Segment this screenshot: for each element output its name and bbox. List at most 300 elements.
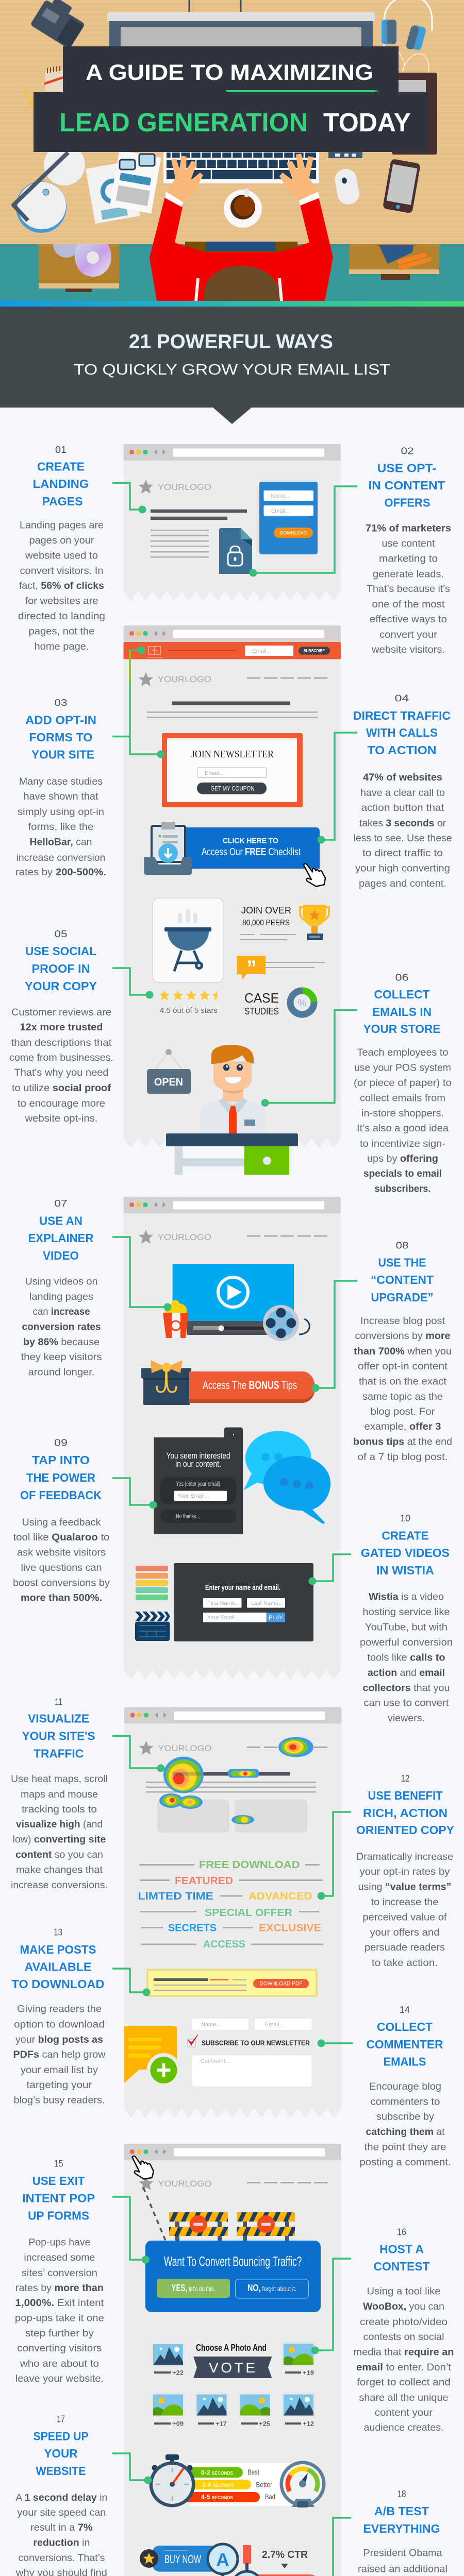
body: maps and mouse xyxy=(21,1789,98,1800)
body: around longer. xyxy=(28,1367,95,1378)
number: 04 xyxy=(395,693,409,704)
panel: browser window 1, landing page xyxy=(124,444,341,601)
step 09 text xyxy=(13,1437,110,1604)
star rating xyxy=(159,990,218,1015)
body: subscribers. xyxy=(374,1184,431,1194)
exit intent popup xyxy=(145,2241,321,2312)
heading: IN CONTENT xyxy=(368,479,445,492)
join over 80,000 peers xyxy=(240,905,296,940)
step 13 text xyxy=(11,1927,106,2106)
title line 2 white word: TODAY xyxy=(323,108,411,137)
body: to encourage more xyxy=(18,1098,105,1109)
heading xyxy=(11,1943,105,1991)
heat spot: title bar xyxy=(228,1769,259,1777)
body: Dramatically increase xyxy=(356,1852,453,1862)
heading: TRAFFIC xyxy=(34,1747,84,1760)
body: Many case studies xyxy=(19,776,103,787)
step 15 text xyxy=(15,2159,104,2384)
body: pages, not the xyxy=(29,626,95,637)
heading: GATED VIDEOS xyxy=(361,1546,450,1560)
heading xyxy=(353,709,451,757)
blue sign-up form: Name... xyxy=(271,493,291,499)
connector arrow: step 09 xyxy=(112,1478,157,1509)
speech bubbles xyxy=(243,1431,330,1524)
body: commenters to xyxy=(370,2097,440,2108)
CTR labels xyxy=(159,2549,308,2576)
body: audience creates. xyxy=(364,2422,443,2433)
heading xyxy=(371,1256,434,1304)
heading: CREATE xyxy=(382,1529,429,1543)
feedback survey card xyxy=(154,1427,243,1534)
gated video form: Last Name... xyxy=(251,1600,283,1606)
heading: TAP INTO xyxy=(32,1453,90,1467)
testimonial quote xyxy=(237,956,325,980)
body: Using a feedback xyxy=(22,1517,101,1528)
blue sign-up form: Email... xyxy=(271,508,290,514)
vote heading: Choose A Photo And xyxy=(196,2343,267,2353)
download PDF bar xyxy=(146,1969,318,1997)
body xyxy=(356,1852,453,1969)
body: rates by 200-500%. xyxy=(15,867,106,878)
heading: PAGES xyxy=(42,495,82,508)
body: YouTube, but with xyxy=(365,1622,448,1633)
connector arrow: step 10 xyxy=(308,1554,351,1585)
hello bar: Email... xyxy=(252,648,271,654)
newsletter popup: JOIN NEWSLETTER xyxy=(191,749,274,760)
power word cloud: ACCESS xyxy=(203,1939,245,1950)
icon: clipboard in tray xyxy=(144,822,192,875)
page speed chart xyxy=(150,2454,326,2507)
body: simply using opt-in xyxy=(18,807,104,818)
heading xyxy=(22,2174,95,2223)
body: directed to landing xyxy=(18,611,105,622)
hero illustration: desk top view xyxy=(0,0,464,301)
open sign xyxy=(147,1049,191,1094)
icon: locked document xyxy=(219,528,252,574)
body: to take action. xyxy=(372,1958,438,1969)
body: conversions by more xyxy=(355,1331,451,1342)
body: specials to email xyxy=(363,1168,442,1179)
connector arrow: step 13 xyxy=(112,1969,151,1996)
speed bars: 2-4 SECONDS xyxy=(202,2481,234,2488)
heading xyxy=(356,1789,454,1837)
body: using “value terms” xyxy=(358,1882,452,1893)
panel: browser window 3, video, feedback, gated video xyxy=(124,1197,341,1680)
body: generate leads. xyxy=(373,569,444,580)
heading: YOUR COPY xyxy=(25,979,97,993)
body: Landing pages are xyxy=(20,520,104,531)
step 01 text xyxy=(18,445,105,652)
heading: LANDING xyxy=(33,477,89,490)
feedback survey card: Your Email... xyxy=(177,1493,209,1499)
body: catching them at xyxy=(366,2127,445,2138)
heading xyxy=(33,2430,89,2478)
body: 12x more trusted xyxy=(20,1022,103,1033)
body: ask website visitors xyxy=(17,1548,106,1558)
body: your blog posts as xyxy=(15,2035,103,2045)
magnifier B xyxy=(232,2545,262,2576)
heading xyxy=(368,461,445,510)
body: Using videos on xyxy=(25,1277,98,1287)
number: 11 xyxy=(55,1697,62,1707)
monitor xyxy=(107,12,375,49)
vote counts: +22 xyxy=(172,2369,184,2376)
connector arrow: step 14 xyxy=(318,2039,353,2047)
button A: BUY NOW xyxy=(164,2553,201,2566)
number: 09 xyxy=(54,1437,68,1448)
body: media that require an xyxy=(354,2347,454,2358)
body xyxy=(11,1774,108,1891)
star rating: 4.5 out of 5 stars xyxy=(160,1006,218,1015)
vote ribbon: VOTE xyxy=(209,2360,255,2376)
bonus tips button: Access The BONUS Tips xyxy=(203,1379,297,1392)
number: 17 xyxy=(57,2414,65,2425)
red sweater arms and torso xyxy=(150,195,333,301)
comment form: SUBSCRIBE TO OUR NEWSLETTER xyxy=(202,2039,310,2047)
right drawer xyxy=(349,244,439,280)
body xyxy=(354,1047,452,1194)
body: website visitors. xyxy=(371,645,445,655)
number: 14 xyxy=(400,2005,410,2015)
vote counts: +09 xyxy=(172,2420,184,2428)
body: who are about to xyxy=(20,2359,99,2369)
heading: PROOF IN xyxy=(32,962,90,975)
connector arrow: step 18 xyxy=(318,2518,351,2576)
heading xyxy=(22,1712,95,1760)
body: your opt-in rates by xyxy=(360,1867,450,1877)
body: by 86% because xyxy=(23,1337,100,1348)
gated video form xyxy=(174,1563,313,1641)
body: raised an additional xyxy=(358,2564,448,2575)
step 10 text xyxy=(360,1513,453,1724)
body: HelloBar, can xyxy=(30,837,92,848)
body: more than 500%. xyxy=(21,1593,102,1604)
body: content so you can xyxy=(15,1850,103,1860)
body: visualize high (and xyxy=(16,1819,103,1830)
heading: VISUALIZE xyxy=(28,1712,89,1725)
number: 18 xyxy=(397,2489,406,2499)
shirt cuffs xyxy=(165,192,320,207)
dashed cursor trail xyxy=(143,2188,165,2241)
hello bar xyxy=(124,642,341,659)
hello bar: SUBSCRIBE xyxy=(304,649,325,653)
body: one of the most xyxy=(372,599,445,610)
body: forget to collect and xyxy=(357,2377,451,2388)
panel: browser window 5, exit intent, contest, speed, A/B test xyxy=(124,2144,341,2576)
icon: gift box xyxy=(141,1360,191,1405)
body: use content xyxy=(382,538,435,549)
body: That's why you need xyxy=(14,1067,108,1078)
heading: OF FEEDBACK xyxy=(20,1488,102,1502)
heading xyxy=(28,1214,94,1262)
logo and nav xyxy=(139,1230,327,1244)
connector arrow: step 16 xyxy=(311,2259,351,2354)
report papers and glasses xyxy=(86,150,161,224)
body: subscribe by xyxy=(376,2112,435,2123)
body: 71% of marketers xyxy=(366,523,451,534)
headphones xyxy=(382,0,432,95)
body: action and email xyxy=(368,1668,445,1679)
body: low) converting site xyxy=(12,1835,106,1845)
body: they keep visitors xyxy=(21,1352,102,1363)
magnifier A xyxy=(208,2544,238,2576)
step 14 text xyxy=(360,2005,451,2168)
exit intent popup: Want To Convert Bouncing Traffic? xyxy=(164,2253,302,2269)
green underline xyxy=(226,90,381,92)
heading: AVAILABLE xyxy=(25,1960,92,1974)
heading: INTENT POP xyxy=(22,2192,95,2205)
body: WooBox, you can xyxy=(363,2301,444,2312)
button B xyxy=(255,2574,321,2576)
wooden desk surface xyxy=(0,0,464,244)
power word cloud: SECRETS xyxy=(168,1923,217,1934)
heading: UP FORMS xyxy=(28,2209,89,2223)
body: Use heat maps, scroll xyxy=(11,1774,108,1785)
power word cloud: SPECIAL OFFER xyxy=(205,1907,293,1919)
heading: USE BENEFIT xyxy=(368,1789,442,1802)
newsletter popup: GET MY COUPON xyxy=(210,785,255,792)
connector arrow: step 11 xyxy=(112,1736,165,1772)
icon: stopwatch xyxy=(150,2454,195,2507)
number: 06 xyxy=(395,973,408,983)
heading: EXPLAINER xyxy=(28,1231,94,1245)
body: marketing to xyxy=(379,553,438,565)
heading: EVERYTHING xyxy=(363,2522,440,2535)
body: of a 7 tip blog post. xyxy=(358,1452,448,1463)
keyboard xyxy=(163,152,319,183)
shop counter xyxy=(166,1133,298,1175)
heading: HOST A xyxy=(379,2242,424,2256)
body: home page. xyxy=(34,641,89,652)
body: action button that xyxy=(361,803,444,814)
case studies: STUDIES xyxy=(244,1006,279,1016)
heading: COLLECT xyxy=(374,988,430,1001)
body: tool like Qualaroo to xyxy=(13,1532,109,1543)
heading xyxy=(25,944,97,993)
heading: YOUR STORE xyxy=(363,1022,440,1036)
connector arrow: step 06 xyxy=(261,1010,357,1107)
tablet xyxy=(392,73,437,155)
BBQ product card xyxy=(153,898,223,982)
body: Pop-ups have xyxy=(28,2237,90,2248)
heading: TO ACTION xyxy=(367,743,436,757)
body: pages and content. xyxy=(359,878,446,889)
body: tools like calls to xyxy=(367,1653,445,1663)
body: same topic as the xyxy=(362,1392,443,1402)
subtitle headline: 21 POWERFUL WAYS xyxy=(129,331,333,353)
body: rates by more than xyxy=(15,2283,104,2294)
number: 15 xyxy=(54,2159,63,2169)
case studies xyxy=(244,990,314,1016)
number: 13 xyxy=(54,1927,62,1937)
body: than descriptions that xyxy=(11,1038,112,1048)
exit intent popup: YES, let's do this. xyxy=(171,2283,216,2293)
body: create photo/video xyxy=(360,2317,448,2328)
body: use your POS system xyxy=(354,1062,451,1074)
heading: EMAILS IN xyxy=(372,1005,432,1019)
logo and nav xyxy=(139,1741,327,1755)
call to action banner xyxy=(144,822,327,888)
teal floor xyxy=(0,244,464,301)
body xyxy=(15,776,106,878)
headline bars xyxy=(147,702,318,718)
heading: DIRECT TRAFFIC xyxy=(353,709,451,722)
gated video form: Your Email... xyxy=(207,1615,239,1621)
body xyxy=(354,772,452,889)
heat spot: content left xyxy=(159,1793,203,1809)
power word cloud: FEATURED xyxy=(175,1875,233,1887)
icon: trophy xyxy=(300,905,329,940)
body: sites’ conversion xyxy=(22,2268,97,2279)
logo and nav: YOURLOGO xyxy=(158,1232,211,1242)
subtitle line: TO QUICKLY GROW YOUR EMAIL LIST xyxy=(74,362,390,378)
subtitle section xyxy=(0,307,464,424)
heading: RICH, ACTION xyxy=(363,1806,448,1820)
speed bars xyxy=(180,2467,275,2502)
step 07 text xyxy=(21,1198,102,1378)
power word cloud: ADVANCED xyxy=(248,1891,312,1902)
body: Customer reviews are xyxy=(11,1007,111,1018)
heading: ADD OPT-IN xyxy=(25,714,96,727)
title banner xyxy=(34,46,428,152)
heading: MAKE POSTS xyxy=(20,1943,96,1956)
heading: USE AN xyxy=(39,1214,82,1228)
speed bars: Bad xyxy=(265,2493,275,2501)
vote counts: +12 xyxy=(303,2420,314,2428)
body: conversion rates xyxy=(22,1322,101,1332)
body: come from businesses. xyxy=(9,1053,113,1063)
speed bars: 0-2 SECONDS xyxy=(201,2469,233,2476)
comment form xyxy=(188,2019,311,2087)
body: content your xyxy=(375,2408,433,2418)
body: your email list by xyxy=(21,2065,98,2076)
CTR labels: 2.7% CTR xyxy=(262,2549,308,2561)
bonus tips button xyxy=(189,1371,315,1403)
body: targeting your xyxy=(27,2080,92,2091)
step 05 text xyxy=(9,929,113,1124)
heading: WEBSITE xyxy=(36,2464,86,2478)
step 18 text xyxy=(353,2489,453,2576)
feedback survey card: You seem interested xyxy=(167,1451,230,1461)
heading: FORMS TO xyxy=(29,731,93,744)
body: (or piece of paper) to xyxy=(354,1078,452,1089)
heading: EMAILS xyxy=(384,2055,426,2069)
call to action banner: CLICK HERE TO xyxy=(223,837,278,845)
body: A 1 second delay in xyxy=(15,2493,107,2503)
body: takes 3 seconds or xyxy=(359,818,446,829)
join over 80,000 peers: JOIN OVER xyxy=(241,905,291,916)
case studies: % xyxy=(298,998,307,1009)
body xyxy=(13,2493,110,2576)
body: less to see. Use these xyxy=(354,833,452,844)
body: to increase the xyxy=(371,1897,438,1908)
body xyxy=(353,1316,452,1463)
heading: VIDEO xyxy=(43,1249,79,1262)
phone xyxy=(383,159,421,213)
body xyxy=(360,2081,451,2168)
body: reduction in xyxy=(33,2538,90,2548)
body xyxy=(9,1007,113,1124)
body: Using a tool like xyxy=(367,2286,440,2297)
connector arrow: step 03 xyxy=(112,646,165,758)
lamp xyxy=(13,144,85,233)
body: President Obama xyxy=(363,2548,442,2558)
newsletter popup xyxy=(162,733,303,807)
page text bars xyxy=(151,510,247,557)
body: pop-ups take it one xyxy=(15,2313,104,2324)
body: Wistia is a video xyxy=(369,1592,444,1603)
heading: USE THE xyxy=(378,1256,426,1269)
body: collectors that you xyxy=(363,1683,450,1693)
body xyxy=(366,523,451,655)
chair xyxy=(185,242,297,301)
body xyxy=(13,2004,106,2106)
connector arrow: step 05 xyxy=(112,968,154,998)
monitor stand lines xyxy=(189,0,241,12)
step 04 text xyxy=(353,693,452,889)
step 11 text xyxy=(11,1697,108,1891)
body: your offers and xyxy=(370,1927,439,1938)
heat spot: content right xyxy=(231,1815,254,1824)
body: increase conversion xyxy=(16,853,105,863)
heading: YOUR SITE'S xyxy=(22,1730,95,1743)
number: 02 xyxy=(401,446,413,456)
body: Giving readers the xyxy=(17,2004,102,2015)
heading: OFFERS xyxy=(385,496,430,510)
page wireframe xyxy=(146,1772,317,1833)
gated video form: PLAY xyxy=(269,1615,283,1621)
coffee cup xyxy=(224,189,262,228)
logo and nav: YOURLOGO xyxy=(158,2179,211,2189)
mouse xyxy=(333,167,361,206)
power word cloud: LIMTED TIME xyxy=(138,1891,213,1902)
number: 05 xyxy=(55,929,67,939)
body: fact, 56% of clicks xyxy=(19,581,104,591)
body: result in a 7% xyxy=(30,2522,93,2533)
heading: WITH CALLS xyxy=(366,726,438,739)
number: 12 xyxy=(401,1773,409,1784)
connector arrow: step 01 xyxy=(112,483,146,513)
icon: hand cursor xyxy=(303,860,327,888)
body: your site speed can xyxy=(17,2507,106,2518)
body: boost conversions by xyxy=(13,1578,110,1589)
icon: speed gauge xyxy=(279,2461,326,2507)
A/B test illustration xyxy=(140,2544,321,2576)
body xyxy=(354,2286,454,2433)
heading: A/B TEST xyxy=(374,2504,429,2518)
heading: COLLECT xyxy=(377,2020,433,2033)
heading: COMMENTER xyxy=(366,2038,443,2051)
body: PDFs can help grow xyxy=(13,2049,106,2060)
body xyxy=(18,520,105,652)
body: Encourage blog xyxy=(369,2081,441,2092)
body: your high converting xyxy=(355,863,450,874)
body: hosting service like xyxy=(363,1607,450,1618)
body: landing pages xyxy=(29,1292,93,1302)
comment form: Email... xyxy=(265,2022,284,2028)
icon: checked box xyxy=(188,2035,198,2047)
call to action banner: Access Our FREE Checklist xyxy=(202,846,301,858)
body: email to enter. Don’t xyxy=(356,2362,452,2373)
newsletter popup: Email... xyxy=(205,770,224,776)
body: make changes that xyxy=(16,1865,103,1876)
body: It’s also a good idea xyxy=(357,1123,449,1134)
notebook and pencil xyxy=(24,66,64,107)
icon: popcorn xyxy=(163,1300,189,1338)
body xyxy=(15,2237,104,2384)
body: the point they are xyxy=(364,2142,446,2153)
step 08 text xyxy=(353,1241,452,1463)
